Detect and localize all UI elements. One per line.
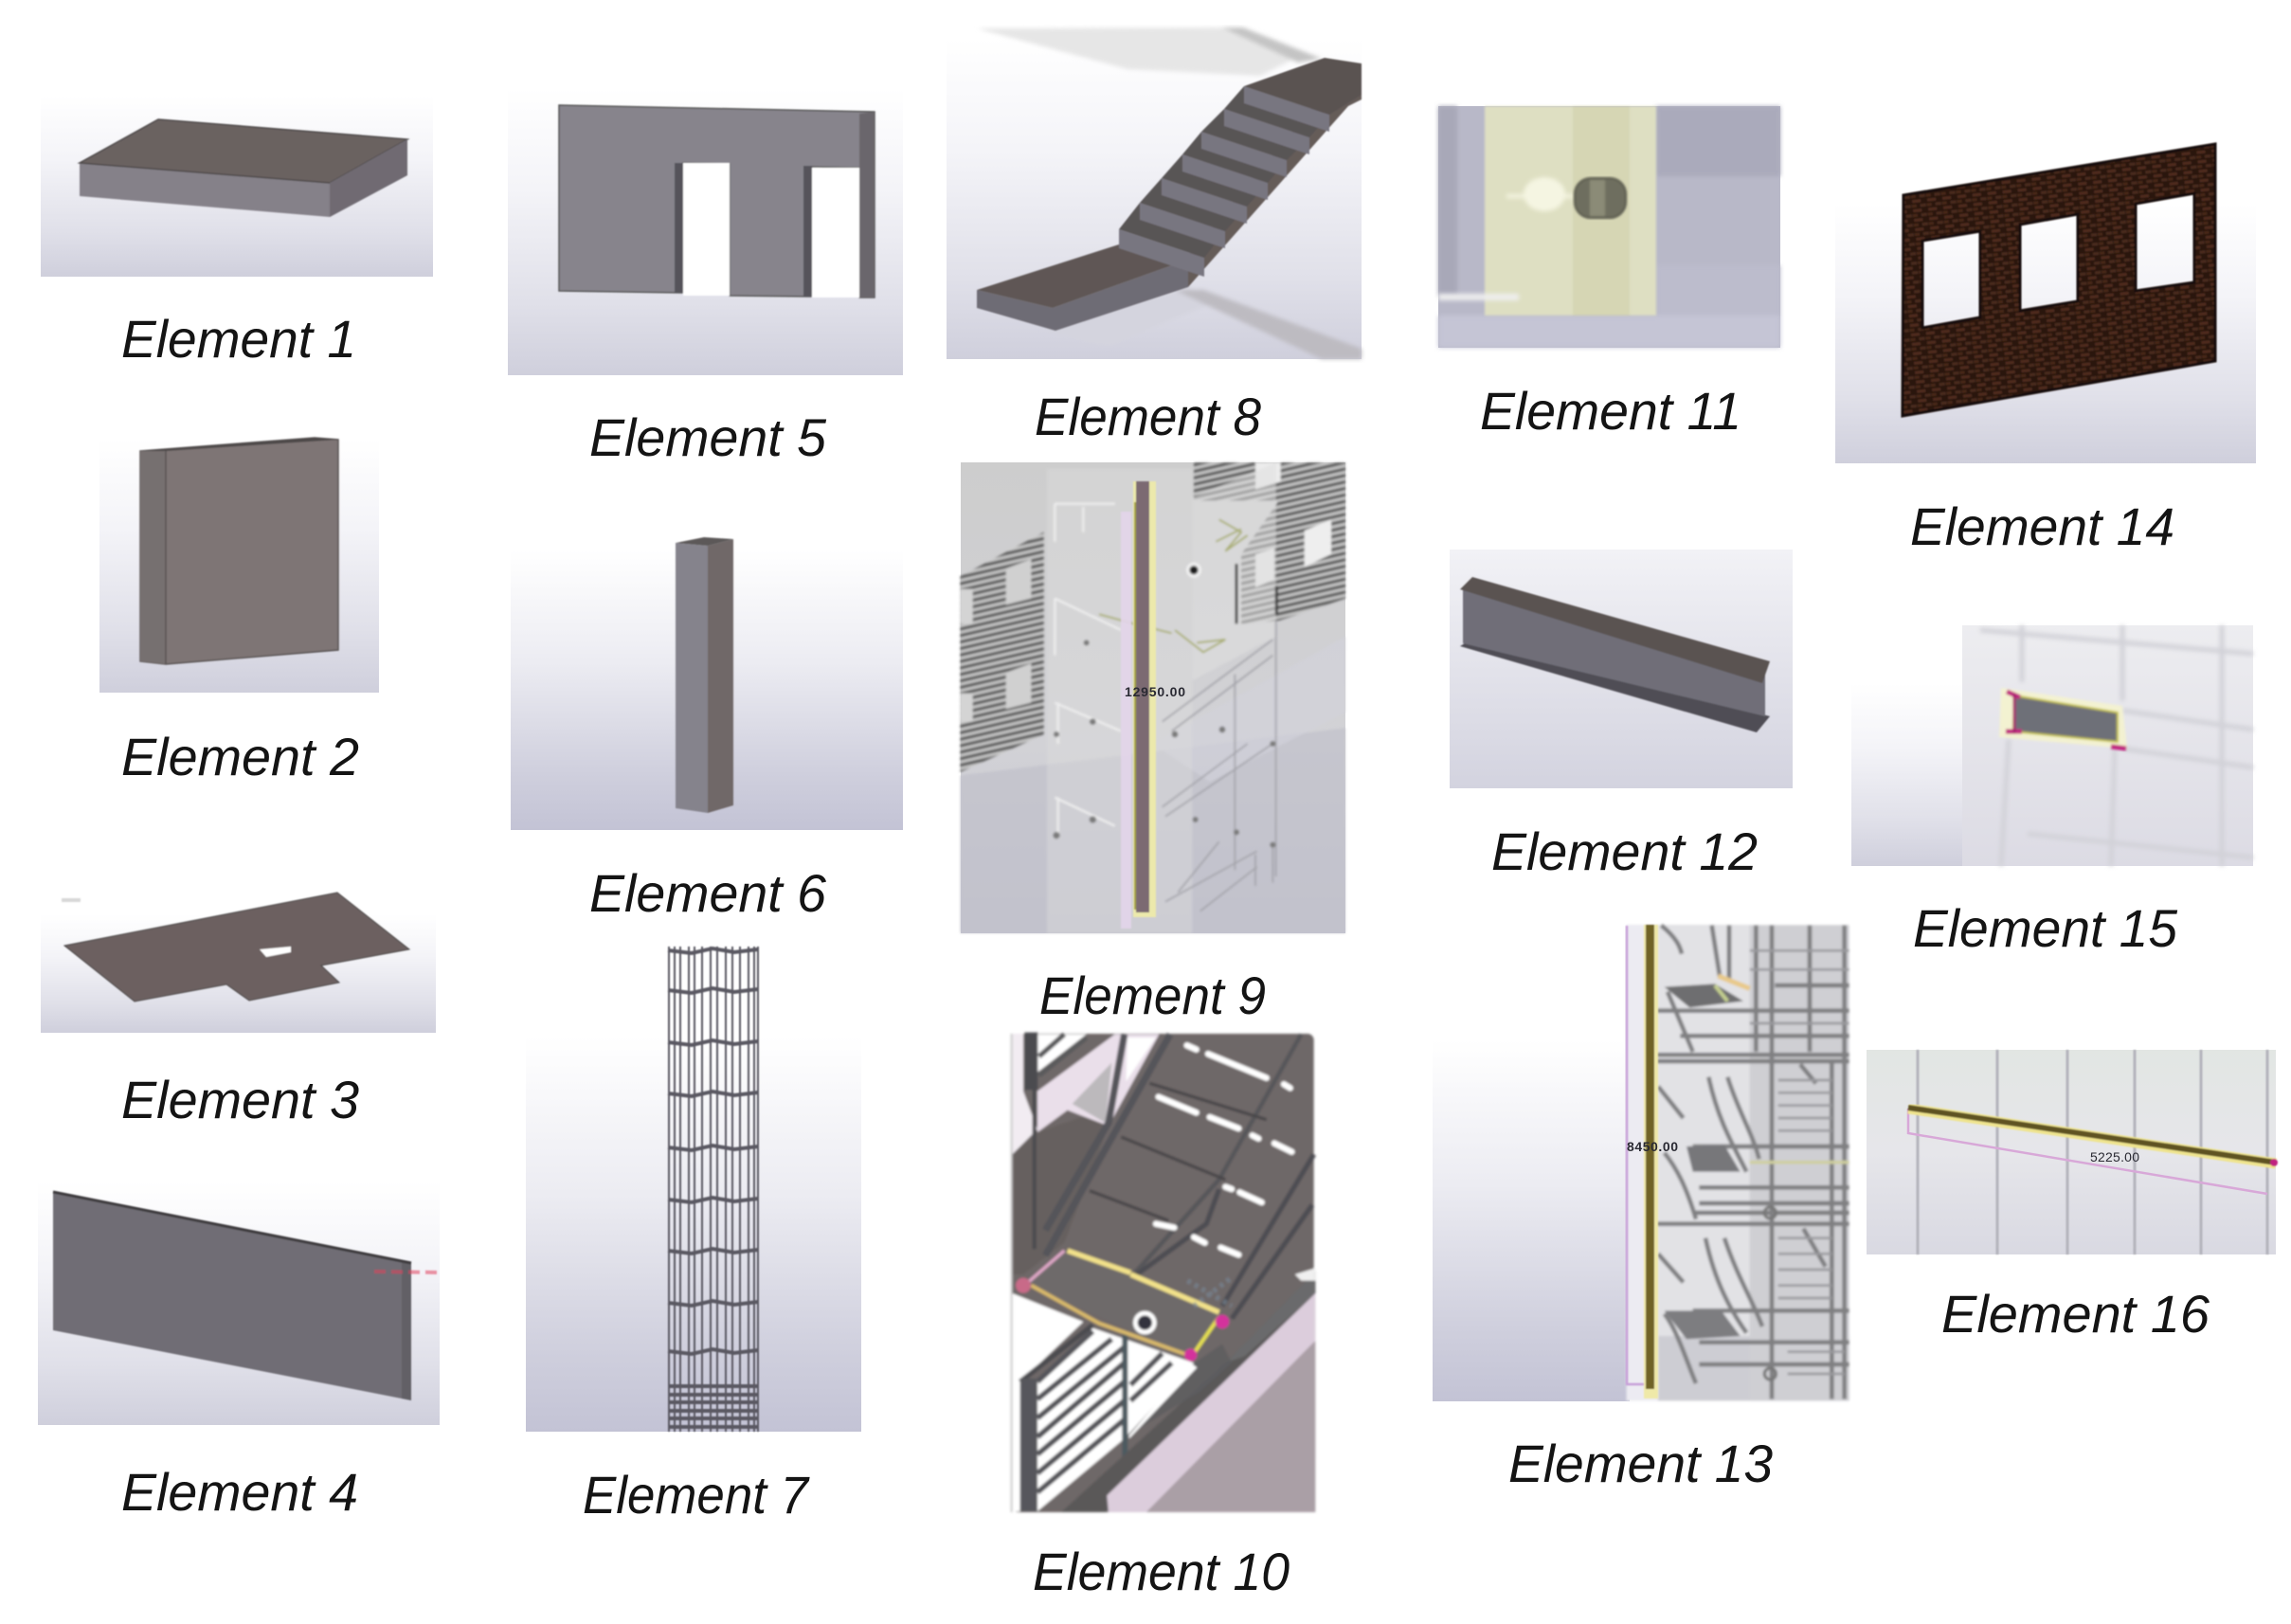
icon: cylinder	[1575, 178, 1626, 218]
caption: element 9: Element 9	[1039, 965, 1266, 1025]
icon: grid lines	[1980, 625, 2253, 866]
panel: element 8	[947, 27, 1362, 446]
dimension label: 5225.00	[2090, 1149, 2139, 1164]
dimension label: 12950.00	[1125, 684, 1185, 699]
icon: translucent yellow member	[1485, 106, 1656, 316]
caption: element 10: Element 10	[1033, 1542, 1290, 1601]
panel: element 3	[41, 893, 436, 1129]
caption: element 5: Element 5	[589, 407, 827, 467]
icon: inclined wall	[53, 1192, 438, 1400]
caption: element 15: Element 15	[1913, 898, 2178, 958]
icon: highlighted column	[1627, 925, 1658, 1398]
caption: element 11: Element 11	[1480, 381, 1741, 441]
panel: element 10	[1011, 1034, 1315, 1601]
icon: slab	[80, 119, 407, 217]
caption: element 2: Element 2	[121, 727, 359, 786]
icon: highlighted column	[1121, 481, 1156, 929]
icon: grid lines	[1918, 1050, 2267, 1254]
panel: element 16	[1867, 1050, 2278, 1344]
icon: staircase	[977, 58, 1362, 331]
caption: element 12: Element 12	[1491, 821, 1758, 881]
icon: building wireframe	[960, 462, 1345, 933]
panel: element 7	[526, 947, 861, 1525]
icon: ghost stair above	[977, 27, 1322, 76]
icon: ghost stair below	[1042, 287, 1362, 359]
caption: element 1: Element 1	[121, 309, 356, 369]
panel: element 2	[99, 438, 379, 786]
caption: element 4: Element 4	[121, 1462, 358, 1522]
panel: element 14	[1835, 144, 2256, 556]
caption: element 6: Element 6	[589, 863, 827, 923]
caption: element 14: Element 14	[1910, 496, 2174, 556]
icon: highlighted beam	[1908, 1108, 2278, 1166]
caption: element 13: Element 13	[1508, 1434, 1773, 1493]
caption: element 8: Element 8	[1035, 387, 1261, 446]
panel: element 9	[960, 462, 1345, 1025]
icon: staircase close-up	[1011, 1034, 1315, 1512]
panel: element 12	[1450, 550, 1793, 881]
panel: element 4	[38, 1182, 440, 1522]
icon: rebar cage	[668, 947, 758, 1432]
panel: element 15	[1851, 625, 2253, 958]
icon: brick wall with windows	[1903, 144, 2215, 416]
icon: wall block	[140, 438, 338, 664]
caption: element 7: Element 7	[583, 1465, 810, 1525]
panel: element 1	[41, 96, 433, 369]
icon: floor plate	[62, 893, 409, 1001]
panel: element 6	[511, 537, 903, 923]
icon: wall with openings	[559, 105, 875, 298]
panel: element 13	[1433, 925, 1849, 1493]
icon: column	[676, 537, 733, 813]
icon: steel I-beam	[1460, 577, 1770, 732]
icon: dimension line	[1908, 1109, 2267, 1194]
icon: highlight glint	[1438, 177, 1573, 300]
icon: background blocks	[1438, 106, 1780, 348]
caption: element 16: Element 16	[1941, 1284, 2210, 1344]
icon: stair wireframe	[1627, 925, 1849, 1400]
panel: element 5	[508, 88, 903, 467]
panel: element 11	[1438, 106, 1780, 441]
caption: element 3: Element 3	[121, 1070, 359, 1129]
icon: highlighted beam	[1999, 688, 2127, 749]
dimension label: 8450.00	[1627, 1139, 1678, 1154]
